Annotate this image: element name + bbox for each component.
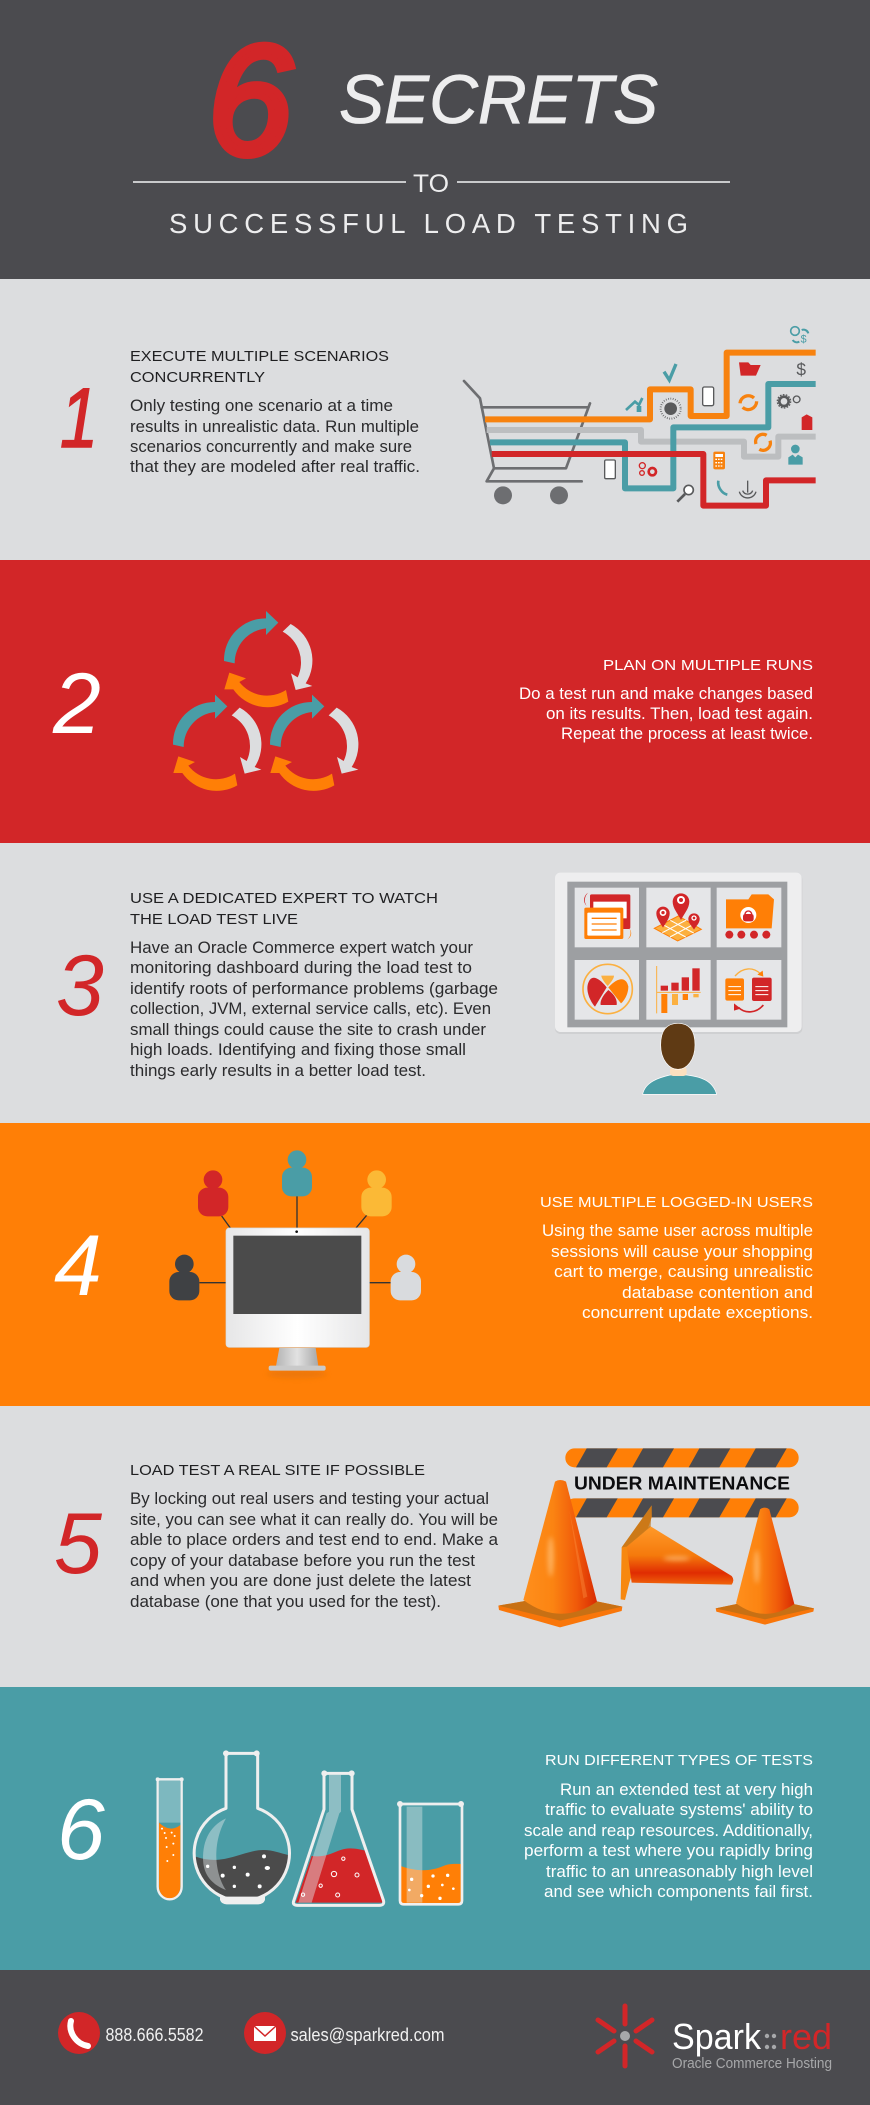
body text 4 [542, 1222, 813, 1322]
body text 6 [524, 1781, 813, 1901]
panel: secret 2 [0, 560, 870, 843]
logo: wordmark [672, 2016, 832, 2072]
number 3: 3 [56, 938, 104, 1034]
body text 6: traffic to an unreasonably high level [546, 1863, 813, 1881]
computer [226, 1228, 369, 1379]
body text 4: database contention and [622, 1284, 813, 1302]
left cone [498, 1480, 622, 1627]
heading 6: RUN DIFFERENT TYPES OF TESTS [545, 1752, 813, 1769]
heading 5: LOAD TEST A REAL SITE IF POSSIBLE [130, 1462, 425, 1479]
coloured lines [485, 353, 816, 506]
body text 5: and when you are done just delete the latest [130, 1572, 471, 1590]
number 2: 2 [52, 656, 101, 752]
icon: locked folder [725, 894, 774, 939]
body text 1 [130, 397, 420, 476]
body text 3: monitoring dashboard during the load test to [130, 959, 472, 977]
dashboard screen [555, 873, 802, 1034]
body text 1: scenarios concurrently and make sure [130, 438, 412, 456]
body text 5 [130, 1490, 499, 1611]
body text 2: on its results. Then, load test again. [546, 705, 813, 723]
illustration: lab glassware [156, 1750, 464, 1905]
body text 1: that they are modeled after real traffic. [130, 458, 420, 476]
panel: footer [0, 1970, 870, 2105]
body text 5: By locking out real users and testing your actual [130, 1490, 489, 1508]
test tube [156, 1777, 184, 1899]
body text 3: things early results in a better load test. [130, 1062, 426, 1080]
illustration: cycle arrows [173, 611, 358, 791]
body text 3 [130, 939, 498, 1080]
number 5: 5 [54, 1496, 103, 1592]
illustration: under maintenance barrier and cones [498, 1448, 814, 1627]
panel: secret 6 [0, 1687, 870, 1970]
panel: secret 3 [0, 843, 870, 1123]
title: secrets: SECRETS [339, 61, 658, 138]
panel: header [0, 0, 870, 279]
icon: map pins [654, 893, 701, 941]
cart frame [464, 381, 590, 481]
small icons: $ [801, 334, 807, 346]
body text 3: small things could cause the site to crash under [130, 1021, 487, 1039]
heading 1: EXECUTE MULTIPLE SCENARIOS [130, 348, 389, 365]
icon: bar chart [657, 966, 701, 1013]
heading 2: PLAN ON MULTIPLE RUNS [603, 657, 813, 674]
connector lines [199, 1196, 391, 1283]
small icons [605, 327, 812, 502]
body text 6: and see which components fail first. [544, 1883, 813, 1901]
barrier bottom stripe [565, 1498, 799, 1517]
right cone [716, 1508, 814, 1625]
body text 6: perform a test where you rapidly bring [524, 1842, 813, 1860]
heading 1 [130, 348, 389, 386]
body text 6: Run an extended test at very high [560, 1781, 813, 1799]
body text 1: Only testing one scenario at a time [130, 397, 393, 415]
number 1: 1 [60, 371, 98, 465]
viewer figure [643, 1023, 717, 1094]
body text 2 [519, 685, 813, 743]
round flask [194, 1750, 289, 1904]
body text 3: identify roots of performance problems (garbage [130, 980, 498, 998]
heading 1: CONCURRENTLY [130, 369, 265, 386]
icon: email [244, 2012, 286, 2054]
logo: wordmark: Spark [672, 2016, 762, 2057]
body text 6: scale and reap resources. Additionally, [524, 1822, 813, 1840]
body text 5: site, you can see what it can really do. You will be [130, 1511, 498, 1529]
title numeral 6: 6 [208, 14, 292, 188]
email address: sales@sparkred.com [290, 2025, 444, 2045]
body text 3: high loads. Identifying and fixing those small [130, 1041, 466, 1059]
body text 5: copy of your database before you run the test [130, 1552, 475, 1570]
body text 5: database (one that you used for the test). [130, 1593, 441, 1611]
logo: spark mark [598, 2006, 652, 2066]
body text 4: sessions will cause your shopping [551, 1243, 813, 1261]
body text 4: cart to merge, causing unrealistic [554, 1263, 813, 1281]
body text 1: results in unrealistic data. Run multiple [130, 418, 419, 436]
icon: document sync [725, 969, 772, 1012]
body text 6: traffic to evaluate systems' ability to [545, 1801, 813, 1819]
illustration: shopping cart with lines [464, 327, 816, 506]
conical flask [293, 1770, 384, 1905]
phone number: 888.666.5582 [106, 2025, 204, 2045]
illustration: users around computer [169, 1150, 421, 1379]
fallen cone [621, 1505, 733, 1600]
heading 3 [130, 890, 438, 928]
logo: wordmark: red [780, 2016, 832, 2057]
logo: wordmark: Oracle Commerce Hosting [672, 2056, 832, 2072]
heading 3: USE A DEDICATED EXPERT TO WATCH [130, 890, 438, 907]
icon: pie ring [583, 964, 632, 1014]
panel: secret 5 [0, 1406, 870, 1687]
body text 2: Do a test run and make changes based [519, 685, 813, 703]
panel: secret 4 [0, 1123, 870, 1406]
subtitle: SUCCESSFUL LOAD TESTING [169, 208, 688, 239]
heading 3: THE LOAD TEST LIVE [130, 911, 298, 928]
icon: windows [584, 893, 631, 939]
barrier top stripe [565, 1448, 799, 1467]
body text 4: Using the same user across multiple [542, 1222, 813, 1240]
body text 5: able to place orders and test end to end. Make a [130, 1531, 499, 1549]
body text 4: concurrent update exceptions. [582, 1304, 813, 1322]
body text 2: Repeat the process at least twice. [561, 725, 813, 743]
body text 3: Have an Oracle Commerce expert watch your [130, 939, 474, 957]
cart wheels [494, 486, 568, 504]
number 4: 4 [54, 1218, 102, 1314]
under maintenance sign: UNDER MAINTENANCE [574, 1472, 790, 1493]
title: to with rules: TO [413, 170, 449, 198]
user icons [169, 1150, 421, 1300]
small icons: $ [796, 360, 806, 380]
heading 4: USE MULTIPLE LOGGED-IN USERS [540, 1194, 813, 1211]
beaker [397, 1801, 464, 1904]
illustration: dashboard and viewer [555, 873, 802, 1094]
number 6: 6 [57, 1782, 105, 1878]
icon: phone [58, 2012, 100, 2054]
body text 3: collection, JVM, external service calls, etc). Even [130, 1000, 491, 1018]
